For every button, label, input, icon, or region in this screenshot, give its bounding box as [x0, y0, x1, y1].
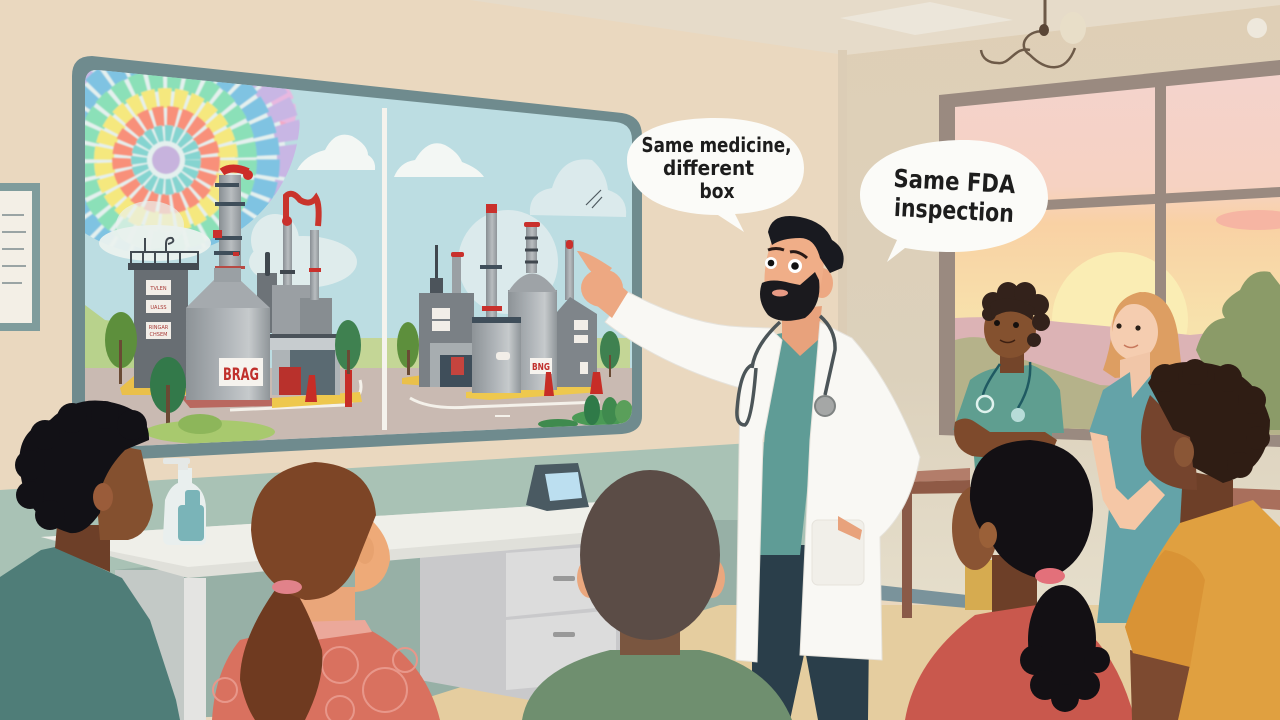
- speech bubble: same medicine: [627, 118, 804, 232]
- factory right: [402, 204, 603, 400]
- nurse left stethoscope: [977, 362, 1030, 422]
- silo: [186, 268, 270, 400]
- face: [1141, 395, 1197, 490]
- hair: [768, 216, 844, 273]
- trees left: [105, 312, 361, 425]
- ground and grass: [85, 305, 635, 453]
- scrub top: [756, 325, 825, 555]
- eyes: [765, 257, 777, 269]
- white coat: [605, 292, 920, 662]
- tie-dye swirl: [85, 70, 300, 246]
- factory right: BNG: [532, 362, 550, 373]
- ear: [1174, 437, 1194, 467]
- desk: [41, 458, 625, 720]
- nurse right: [1089, 292, 1188, 623]
- main stack: [213, 168, 253, 280]
- nurse left: [953, 282, 1064, 470]
- back building: [257, 190, 332, 334]
- tower building with signs: RINGAR: [149, 325, 169, 331]
- speech bubble: same medicine: box: [700, 179, 735, 203]
- hair: [251, 462, 376, 600]
- nurse right dress: [1089, 370, 1188, 623]
- canopy and door: [270, 334, 352, 407]
- child: boy left: [0, 400, 180, 720]
- stethoscope: [737, 316, 835, 425]
- arm: [1130, 650, 1190, 720]
- clouds: [297, 135, 484, 177]
- speech bubble: same FDA: inspection: [893, 193, 1015, 228]
- tower building with signs: [128, 238, 199, 388]
- nurse left scrubs: [953, 365, 1064, 470]
- divider: [382, 108, 387, 430]
- speech bubble: same medicine: different: [663, 156, 754, 180]
- trousers: [752, 545, 870, 720]
- ponytail: [240, 590, 322, 720]
- nurse left crossed arms: [954, 418, 1057, 457]
- screen frame: [72, 56, 642, 459]
- neck and collar: [298, 587, 355, 625]
- hair: [1148, 359, 1270, 483]
- hand pointing: [577, 251, 628, 318]
- tower building with signs: TVLEN: [149, 286, 167, 292]
- child: boy right: [1125, 359, 1280, 720]
- silo: BRAG: [223, 365, 259, 385]
- nurse right arms and hands: [1090, 432, 1165, 530]
- face: [94, 447, 153, 540]
- beard: [760, 272, 819, 321]
- factory left: [120, 168, 362, 408]
- face: [355, 507, 390, 592]
- wall screen: [72, 56, 642, 459]
- window: [939, 60, 1280, 447]
- head: [760, 216, 844, 321]
- neck: [1180, 470, 1233, 525]
- shirt: [1125, 500, 1280, 720]
- tower building with signs: CHSEM: [150, 332, 167, 338]
- child: girl right: [905, 440, 1135, 720]
- child: centre: [522, 470, 792, 720]
- tablet: [526, 463, 589, 511]
- side table: [902, 468, 1280, 618]
- screen picture: [85, 70, 632, 446]
- hair: [15, 400, 149, 533]
- sanitizer bottle: [163, 458, 206, 545]
- child: girl left: [212, 462, 440, 720]
- nurse left legs: [965, 560, 995, 610]
- tower building with signs: UALSS: [150, 305, 167, 311]
- shirt: [0, 547, 180, 720]
- ceiling lamp: [981, 0, 1267, 67]
- glass mark: [586, 190, 602, 208]
- ear: [93, 483, 113, 511]
- trees right and foliage: [145, 322, 633, 444]
- speech bubble: same FDA: Same FDA: [893, 164, 1017, 199]
- speech bubble: same medicine: Same medicine,: [642, 133, 792, 157]
- doctor: [577, 216, 920, 720]
- nurse left head: [982, 282, 1050, 373]
- neck: [55, 525, 110, 572]
- hand in pocket: [838, 516, 862, 540]
- neck: [782, 306, 822, 356]
- speech bubble: same FDA: [860, 140, 1048, 262]
- wall poster: [0, 183, 40, 331]
